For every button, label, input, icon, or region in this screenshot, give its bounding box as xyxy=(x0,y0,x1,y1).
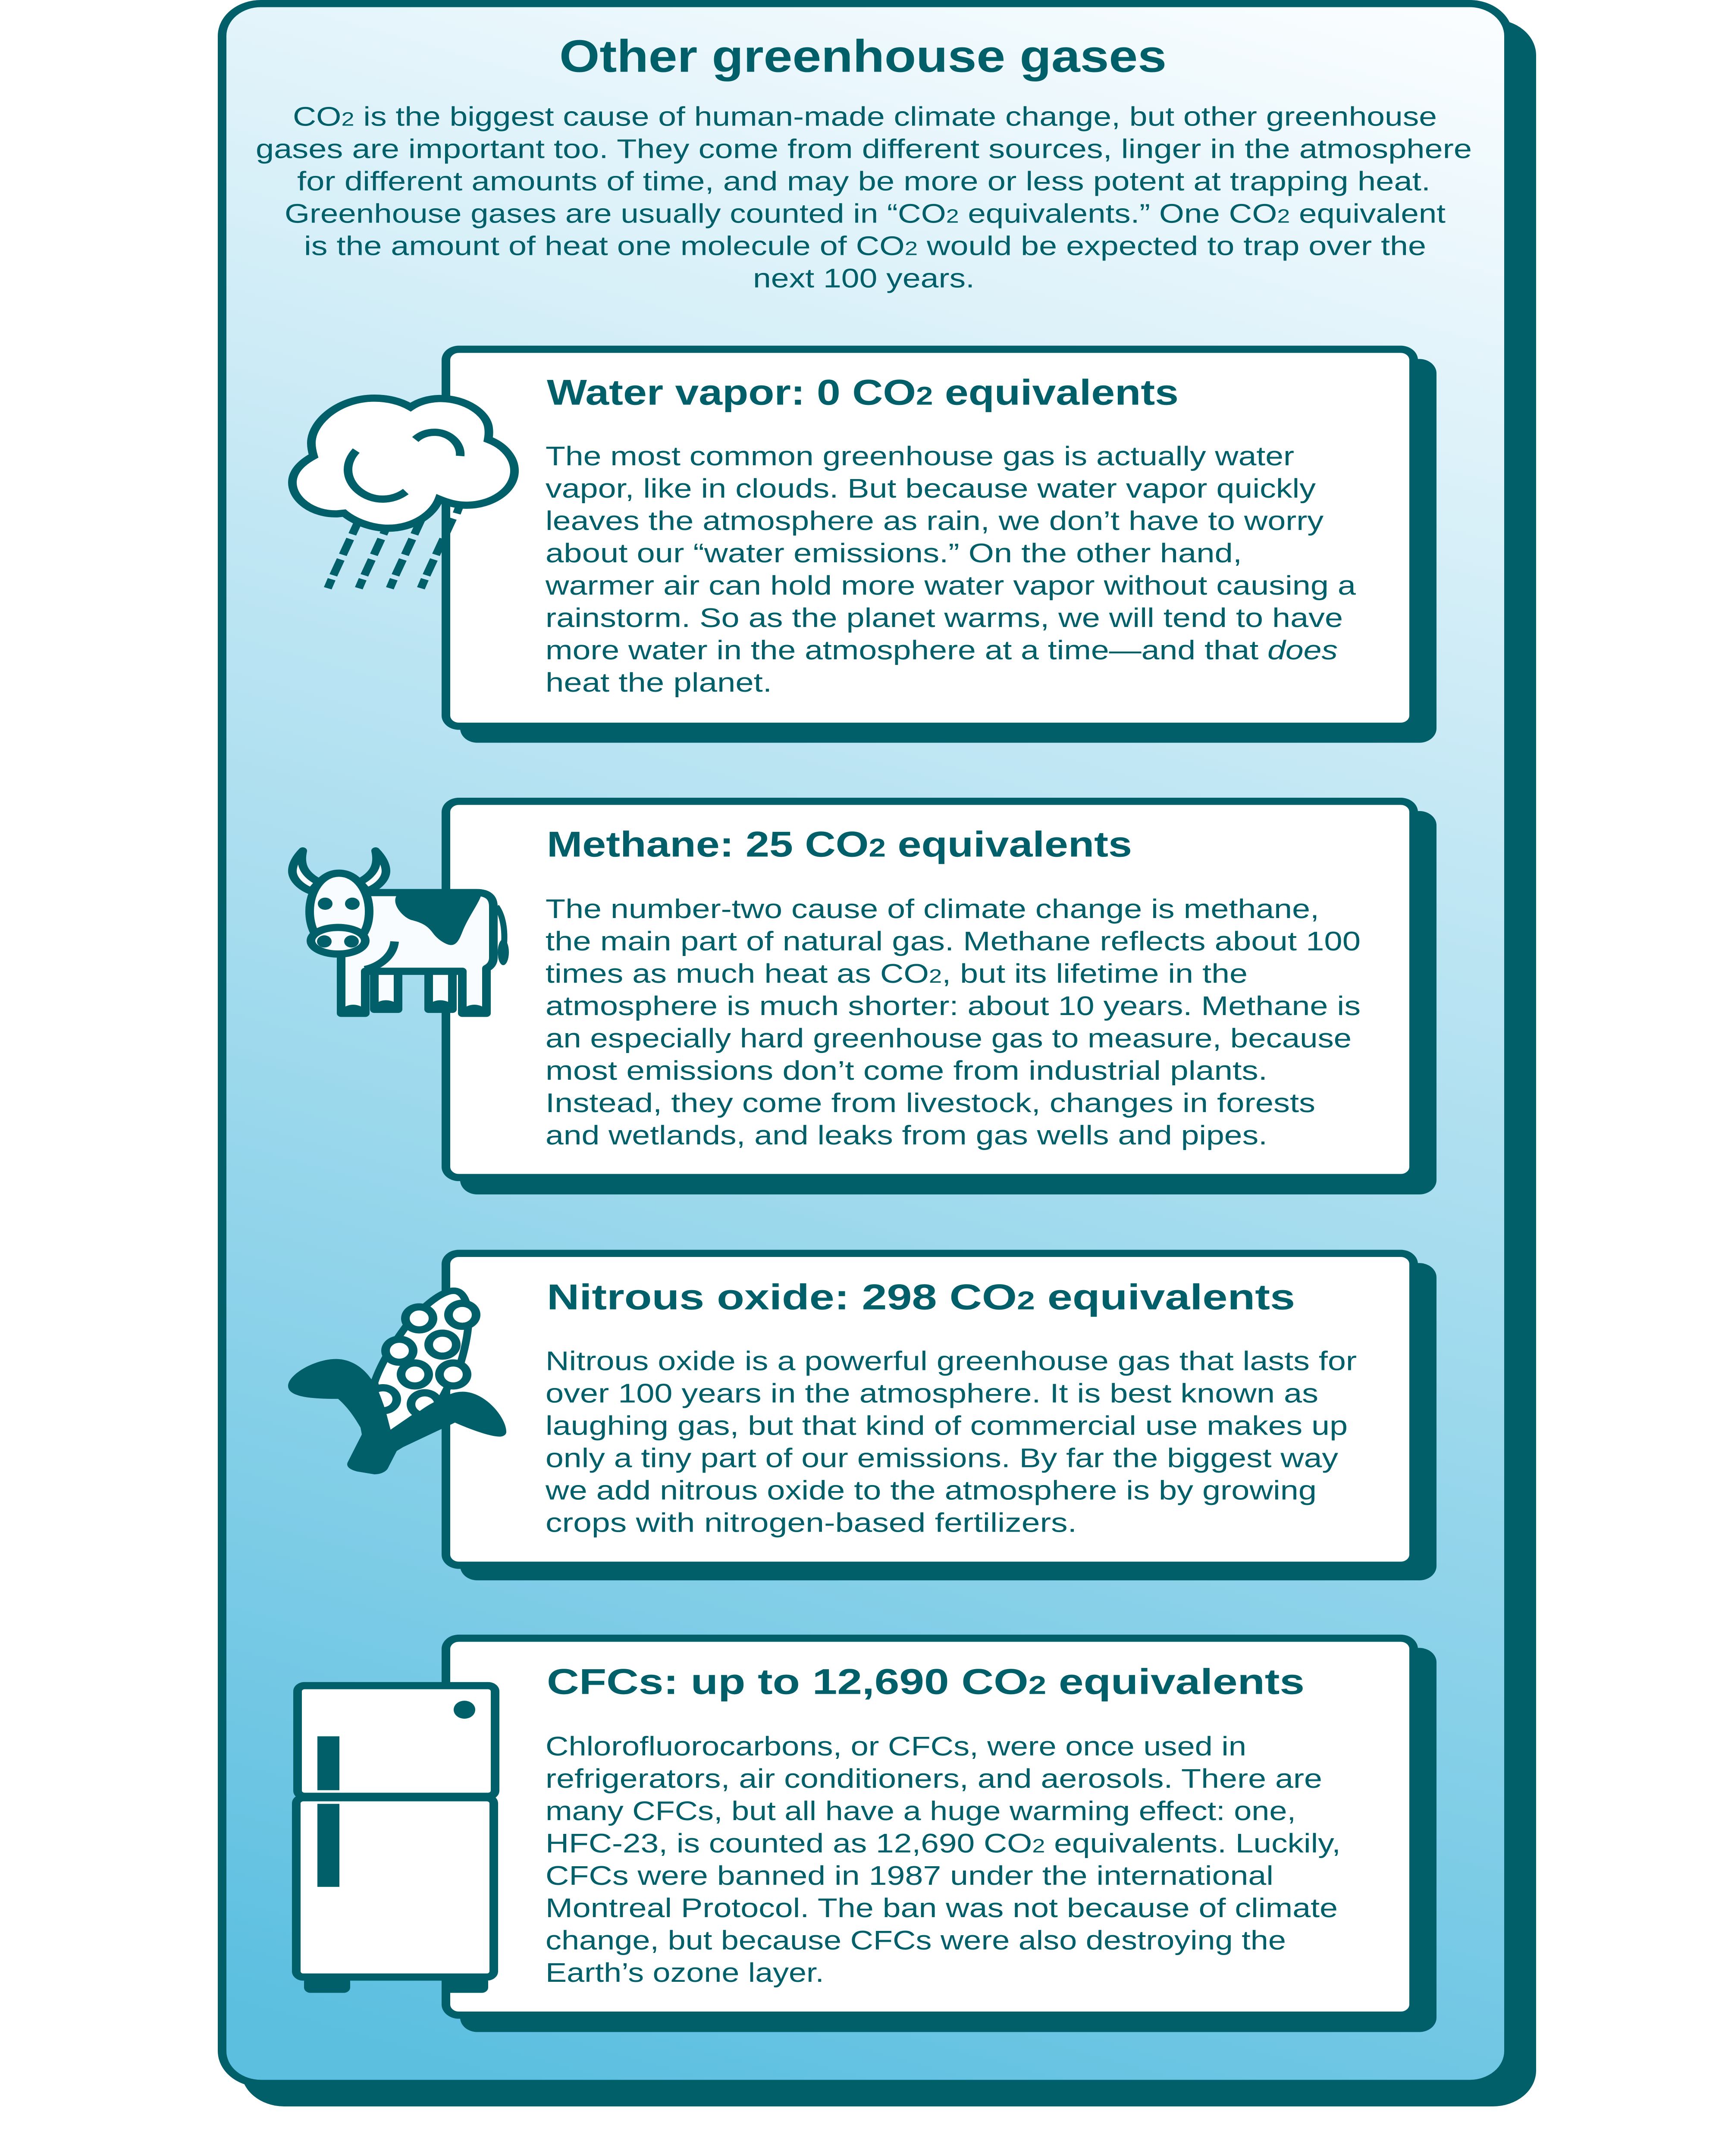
fridge dot xyxy=(454,1701,475,1719)
body text: CFCs: Earth’s ozone layer. xyxy=(546,1957,824,1987)
intro paragraph: next 100 years. xyxy=(753,263,975,293)
panel shadow xyxy=(241,19,1536,2106)
cow tail xyxy=(496,906,504,943)
body text: nitrous oxide: only a tiny part of our emissions. By far the biggest way xyxy=(546,1443,1338,1473)
body text: CFCs: Montreal Protocol. The ban was not because of climate xyxy=(546,1893,1338,1923)
fridge bottom door xyxy=(296,1798,494,1977)
card: nitrous oxide xyxy=(446,1253,1414,1565)
body text: CFCs: refrigerators, air conditioners, and aerosols. There are xyxy=(546,1763,1322,1793)
body text: methane: an especially hard greenhouse gas to measure, because xyxy=(546,1023,1352,1053)
body text: nitrous oxide: crops with nitrogen-based fertilizers. xyxy=(546,1507,1077,1538)
intro paragraph: CO2 is the biggest cause of human-made climate change, but other greenhouse xyxy=(293,101,1437,132)
icon: refrigerator xyxy=(296,1686,495,1993)
cow body and front legs xyxy=(341,893,493,1013)
cloud inner curls xyxy=(348,432,460,499)
body text: nitrous oxide: Nitrous oxide is a powerful greenhouse gas that lasts for xyxy=(546,1346,1357,1376)
heading: CFCs: CFCs: up to 12,690 CO 2 equivalents xyxy=(547,1661,1305,1702)
body text: water vapor: heat the planet. xyxy=(546,667,772,698)
heading: methane: Methane: 25 CO2 equivalents xyxy=(547,824,1132,865)
cow horns xyxy=(292,851,386,891)
body text: CFCs: change, but because CFCs were also destroying the xyxy=(546,1925,1286,1955)
body text: CFCs: HFC-23, is counted as 12,690 CO2 equivalents. Luckily, xyxy=(546,1828,1341,1858)
cow hooves xyxy=(345,1000,482,1015)
rain dashes xyxy=(328,501,461,588)
body text: nitrous oxide: we add nitrous oxide to the atmosphere is by growing xyxy=(545,1475,1317,1505)
title: Other greenhouse gases xyxy=(559,31,1167,81)
corn kernels xyxy=(369,1303,476,1416)
body text: water vapor xyxy=(545,441,1356,698)
body text: CFCs: CFCs were banned in 1987 under the international xyxy=(546,1860,1273,1890)
body text: methane: The number-two cause of climate change is methane, xyxy=(546,893,1319,924)
intro paragraph: for different amounts of time, and may be more or less potent at trapping heat. xyxy=(297,166,1430,196)
card shadow: CFCs xyxy=(460,1648,1436,2032)
cow spot xyxy=(395,895,481,945)
body text: water vapor: warmer air can hold more water vapor without causing a xyxy=(545,570,1356,600)
card shadow: nitrous oxide xyxy=(460,1263,1436,1580)
body text: water vapor: vapor, like in clouds. But because water vapor quickly xyxy=(546,473,1316,504)
cow back legs xyxy=(374,970,452,1009)
heading: nitrous oxide: Nitrous oxide: 298 CO 2 equivalents xyxy=(547,1277,1295,1317)
body text: methane: times as much heat as CO2, but its lifetime in the xyxy=(546,958,1248,988)
body text: nitrous oxide xyxy=(545,1346,1357,1538)
cow muzzle xyxy=(311,928,365,954)
body text: methane: atmosphere is much shorter: about 10 years. Methane is xyxy=(546,991,1361,1021)
fridge top door xyxy=(298,1686,495,1796)
body text: methane: the main part of natural gas. Methane reflects about 100 xyxy=(546,926,1361,956)
body text: CFCs: Chlorofluorocarbons, or CFCs, were once used in xyxy=(546,1731,1246,1761)
card: CFCs xyxy=(446,1638,1414,2015)
body text: nitrous oxide: over 100 years in the atmosphere. It is best known as xyxy=(546,1378,1318,1408)
intro paragraph xyxy=(256,101,1472,293)
body text: CFCs: many CFCs, but all have a huge warming effect: one, xyxy=(546,1796,1296,1826)
corn leaves and stalk xyxy=(288,1359,506,1474)
cloud outline xyxy=(292,398,514,528)
panel: CFCs xyxy=(446,1638,1436,2032)
panel: nitrous oxide xyxy=(446,1253,1436,1580)
body text: methane xyxy=(546,893,1361,1150)
cow head xyxy=(310,873,369,934)
body text: CFCs xyxy=(546,1731,1341,1987)
card shadow: water vapor xyxy=(460,359,1436,743)
corn cob xyxy=(374,1291,469,1435)
cow nostrils xyxy=(317,935,359,948)
card: water vapor xyxy=(446,349,1414,726)
cow eyes xyxy=(318,898,360,910)
body text: methane: Instead, they come from livestock, changes in forests xyxy=(546,1087,1315,1118)
fridge handles xyxy=(317,1736,339,1887)
body text: methane: and wetlands, and leaks from gas wells and pipes. xyxy=(546,1120,1267,1150)
icon: cow xyxy=(292,851,509,1015)
body text: nitrous oxide: laughing gas, but that kind of commercial use makes up xyxy=(546,1410,1348,1441)
icon: rain cloud xyxy=(292,398,514,588)
heading: water vapor: Water vapor: 0 CO2 equivalents xyxy=(547,372,1179,413)
main panel xyxy=(222,3,1509,2084)
body text: water vapor: rainstorm. So as the planet warms, we will tend to have xyxy=(546,603,1343,633)
card shadow: methane xyxy=(460,811,1436,1194)
intro paragraph: is the amount of heat one molecule of CO2 would be expected to trap over the xyxy=(304,231,1426,261)
body text: water vapor: about our “water emissions.” On the other hand, xyxy=(546,538,1242,568)
cow chest line xyxy=(365,941,395,969)
card: methane xyxy=(446,801,1414,1178)
body text: water vapor: more water in the atmosphere at a time—and that does xyxy=(546,635,1338,665)
body text: methane: most emissions don’t come from industrial plants. xyxy=(546,1056,1267,1086)
body text: water vapor: The most common greenhouse gas is actually water xyxy=(546,441,1294,471)
icon: corn xyxy=(288,1291,506,1474)
panel: water vapor xyxy=(446,349,1436,743)
intro paragraph: Greenhouse gases are usually counted in “CO2 equivalents.” One CO2 equivalent xyxy=(285,198,1446,229)
body text: water vapor: leaves the atmosphere as rain, we don’t have to worry xyxy=(546,505,1324,536)
intro paragraph: gases are important too. They come from different sources, linger in the atmosphere xyxy=(256,134,1472,164)
fridge feet xyxy=(304,1976,488,1993)
panel: methane xyxy=(446,801,1436,1194)
